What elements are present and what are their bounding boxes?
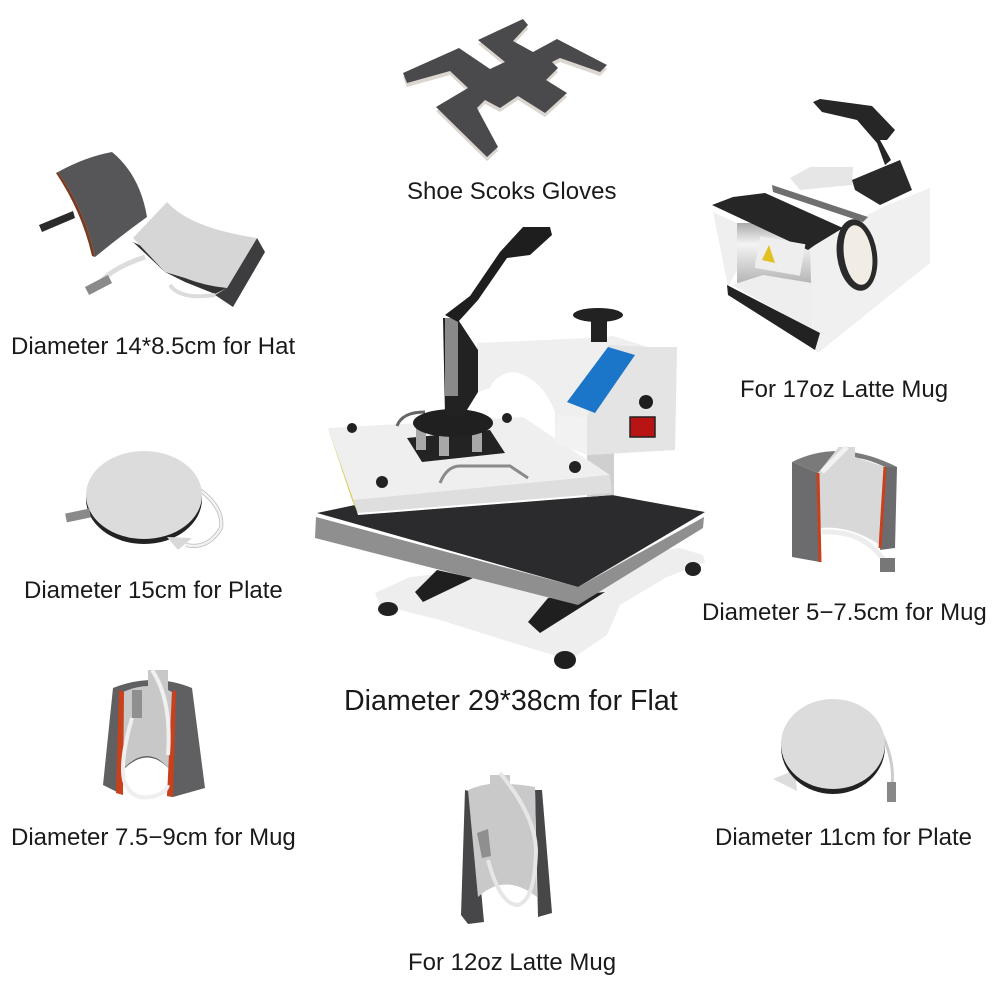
handle	[813, 99, 895, 165]
drum	[737, 223, 815, 283]
mount plate	[407, 430, 505, 462]
lower platen top	[317, 495, 705, 587]
support post	[587, 450, 614, 497]
caption: plate 11: Diameter 11cm for Plate	[715, 824, 972, 851]
icon: shoe platen	[403, 19, 607, 161]
power switch	[630, 417, 655, 437]
icon: 5-7.5cm mug	[792, 447, 897, 572]
warning label	[755, 236, 805, 276]
caption: 17oz: For 17oz Latte Mug	[740, 376, 948, 403]
right side plate	[810, 188, 930, 353]
icon: 11cm plate	[773, 699, 896, 802]
caption: 12oz: For 12oz Latte Mug	[408, 949, 616, 976]
carry handle	[440, 466, 528, 483]
caption: plate 15: Diameter 15cm for Plate	[24, 577, 283, 604]
upper platen	[328, 417, 610, 500]
base interior	[732, 275, 812, 330]
caption: hat: Diameter 14*8.5cm for Hat	[11, 333, 295, 360]
rear wire	[397, 412, 425, 426]
left frame	[713, 212, 737, 287]
lower platen side	[315, 517, 704, 605]
mechanism	[852, 160, 912, 205]
caption: mug 5-7.5: Diameter 5−7.5cm for Mug	[702, 599, 987, 626]
arm and housing	[477, 336, 677, 455]
knob	[573, 308, 623, 342]
caption: shoe: Shoe Scoks Gloves	[407, 178, 616, 205]
power button	[639, 395, 653, 409]
icon: 7.5-9cm mug	[103, 670, 205, 797]
handle	[445, 227, 552, 322]
column	[443, 318, 478, 418]
upper plate	[790, 167, 853, 190]
icon: hat press	[39, 152, 265, 307]
caption: flat: Diameter 29*38cm for Flat	[344, 685, 678, 717]
top bars	[712, 193, 843, 250]
ring heater	[832, 217, 882, 293]
main heat press	[315, 227, 705, 669]
rod bar	[772, 185, 868, 222]
bottom bar	[727, 285, 820, 350]
feet	[378, 602, 398, 616]
blue panel	[567, 347, 635, 413]
caption: mug 7.5-9: Diameter 7.5−9cm for Mug	[11, 824, 296, 851]
springs	[416, 428, 426, 450]
press disk	[413, 409, 493, 437]
icon: 15cm plate	[66, 451, 221, 550]
icon: 12oz latte mug	[461, 773, 552, 924]
icon: 17oz latte mug press	[712, 99, 930, 353]
base	[375, 548, 705, 660]
platen bolts	[347, 413, 581, 488]
